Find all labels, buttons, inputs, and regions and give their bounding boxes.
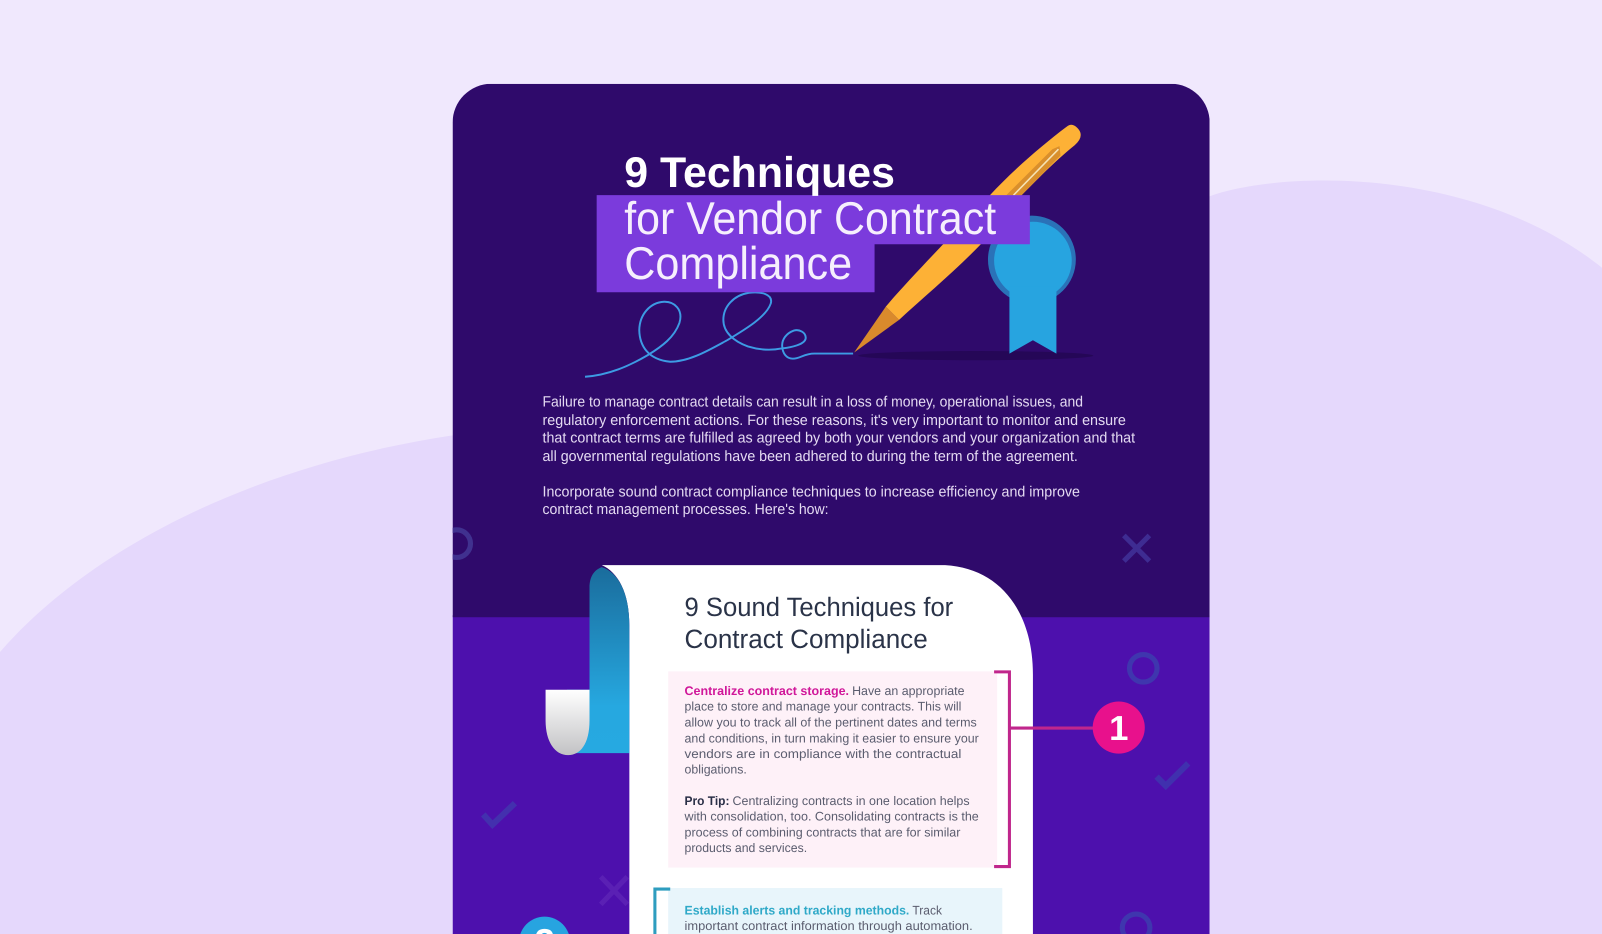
intro text: that contract terms are fulfilled as agreed by both your vendors and your organization and that [543,430,1135,447]
technique 1 text: obligations. [685,762,747,777]
title highlight [597,195,1030,292]
intro text: Failure to manage contract details can result in a loss of money, operational issues, and [543,394,1083,411]
technique 1 text [683,684,979,855]
technique 1 text: vendors are in compliance with the contractual [685,747,961,761]
signature line [585,292,853,377]
intro text: Incorporate sound contract compliance techniques to increase efficiency and improve [543,484,1080,501]
technique 1 text: Centralizing contracts in one location helps [733,794,970,808]
technique 1 text: Pro Tip: [685,794,729,808]
technique 1 text: products and services. [685,841,807,855]
number badge 2 [519,917,570,934]
decorative cross top right [1124,535,1149,561]
technique 1 text: and conditions, in turn making it easier to ensure your [685,731,979,745]
scroll sheet [602,565,1033,934]
technique 2 text [685,903,973,933]
decorative circle top left [452,527,473,560]
icon: seal with ribbon [858,216,1093,360]
technique 1 text: with consolidation, too. Consolidating contracts is the [683,809,979,824]
title: Compliance [624,237,852,289]
title: for Vendor Contract [624,192,997,244]
technique 1 text: Have an appropriate [852,684,965,698]
decorative circle right [1129,655,1157,682]
decorative cross bottom left [601,877,627,904]
technique 1 text: place to store and manage your contracts. This will [685,699,961,714]
number badge 1: 1 [1109,709,1128,748]
technique 1 text: allow you to track all of the pertinent dates and terms [685,715,977,730]
decorative circle bottom right [1122,914,1150,934]
intro text [543,394,1135,518]
section heading: Contract Compliance [685,623,928,654]
title: 9 Techniques [624,148,895,196]
bracket 2 [655,889,670,934]
intro text: regulatory enforcement actions. For these reasons, it's very important to monitor and ensure [543,413,1126,429]
technique 2 text: Establish alerts and tracking methods. [685,903,909,918]
technique 1 text: Centralize contract storage. [685,684,849,698]
intro text: contract management processes. Here's how: [543,502,829,518]
title [624,148,997,289]
technique 2 text: Track [912,903,943,918]
technique 2 text: important contract information through automation. [685,919,973,933]
panel: technique 2 [655,888,1002,934]
section heading: 9 Sound Techniques for [685,592,954,622]
intro text: all governmental regulations have been adhered to during the term of the agreement. [543,449,1078,465]
number badge 1 [1093,702,1145,754]
panel: technique 1 [668,671,1095,868]
icon: pen [854,125,1081,353]
decorative check left [483,803,515,825]
decorative check right [1157,763,1188,786]
technique 1 text: process of combining contracts that are for similar [685,825,960,839]
section heading [685,592,954,654]
panel: card [443,84,1210,934]
scroll roll [546,567,629,755]
bracket and connector 1 [994,672,1095,867]
